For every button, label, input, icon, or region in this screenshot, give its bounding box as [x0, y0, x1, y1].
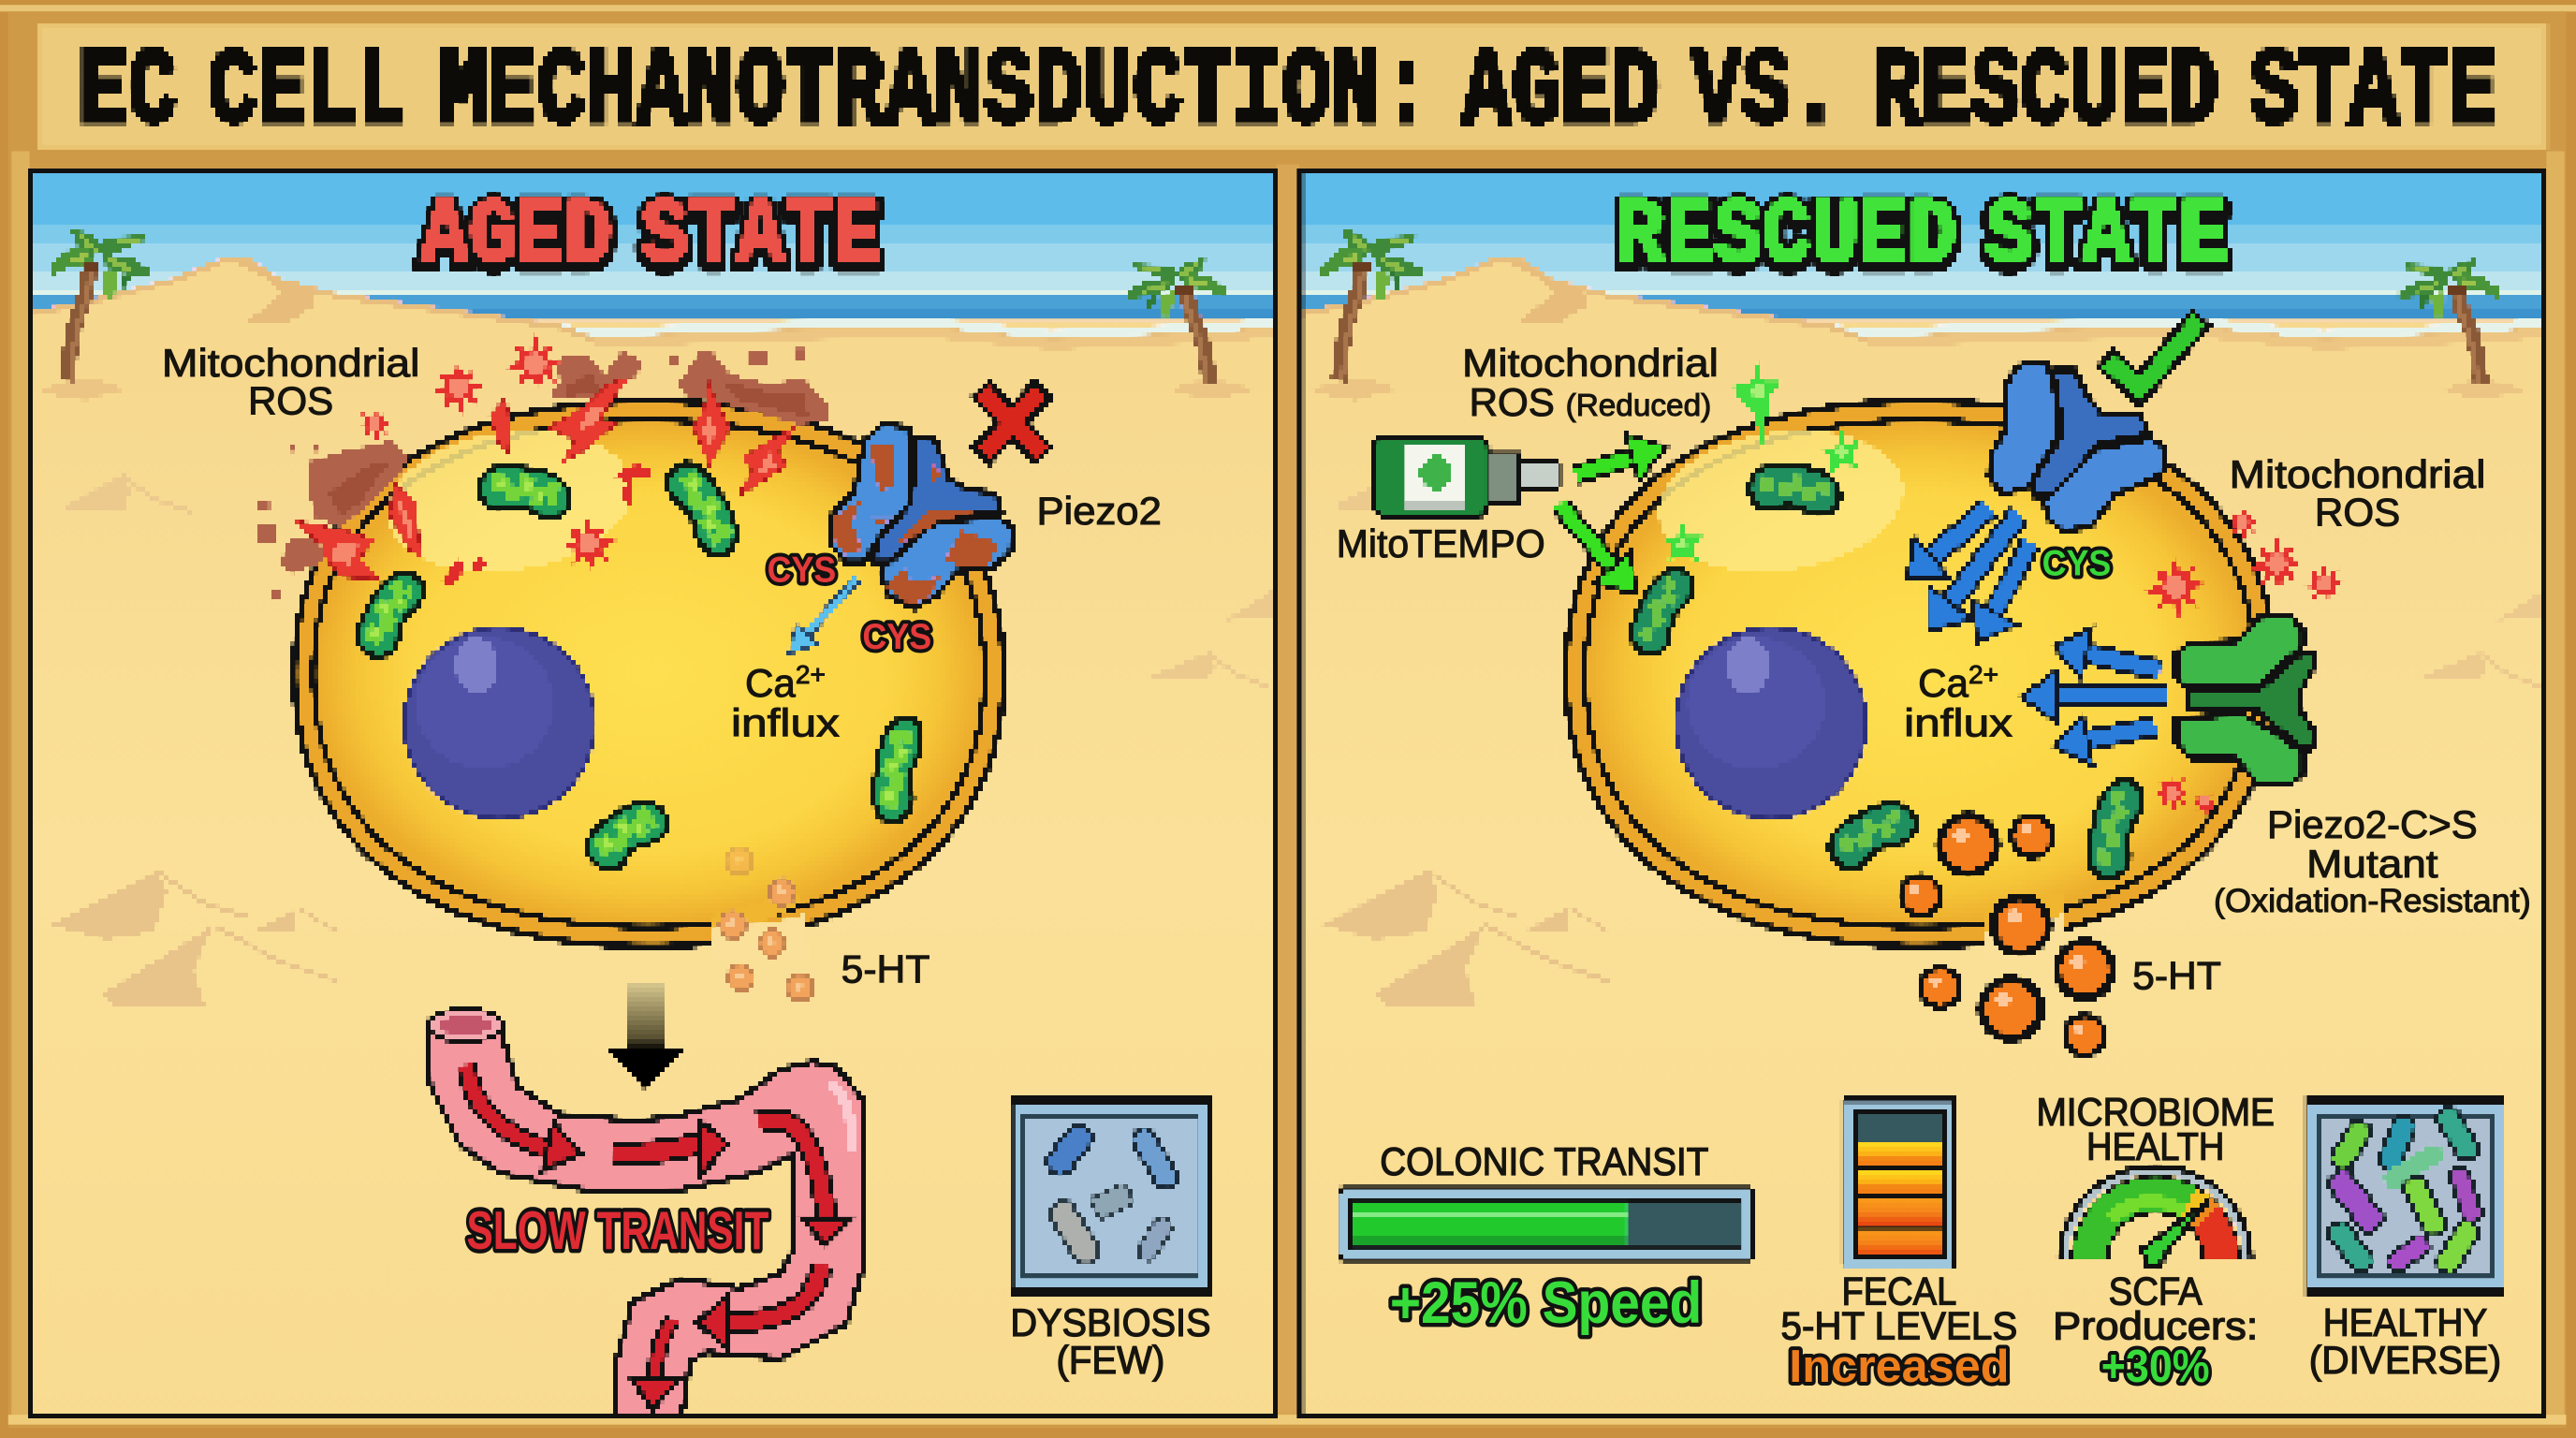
aged state heading: AGED STATE [420, 184, 881, 289]
panel: rescued state [1301, 171, 2545, 1415]
label: calcium influx: influx [731, 700, 840, 744]
label: healthy diverse: HEALTHY [2323, 1300, 2487, 1344]
label: CYS upper: CYS [768, 550, 836, 590]
label: SCFA producers: Producers: [2053, 1303, 2258, 1347]
check mark [2115, 327, 2193, 389]
label: +30%: +30% [2101, 1342, 2210, 1392]
label: MitoTEMPO: MitoTEMPO [1337, 521, 1545, 565]
MitoTEMPO bottle [1373, 437, 1559, 516]
panel border [31, 171, 1275, 1415]
mitochondria [1623, 462, 2145, 882]
label: fecal 5-HT levels: 5-HT LEVELS [1781, 1303, 2017, 1347]
dysbiosis panel icon [1010, 1096, 1211, 1295]
5-HT vesicles [1901, 815, 2113, 1055]
label: Piezo2-C>S mutant: (Oxidation-Resistant) [2214, 883, 2531, 919]
panel: aged state [31, 171, 1275, 1416]
label: SCFA producers: SCFA [2109, 1269, 2203, 1313]
beach background [1303, 174, 2545, 1415]
blue influx arrows from mutant [2021, 620, 2169, 773]
blue influx arrows from Piezo2 [1889, 487, 2054, 654]
beach background [31, 174, 1273, 1415]
fecal serotonin level meter [1841, 1096, 1956, 1270]
microbiome gauge [2062, 1168, 2249, 1269]
label: 5-HT: 5-HT [842, 947, 929, 991]
gap cytoplasm [1986, 894, 2063, 930]
label: CYS lower: CYS [862, 617, 931, 657]
label: calcium influx: Ca [1918, 660, 1998, 705]
gap cytoplasm [710, 892, 801, 930]
darker rust [329, 372, 809, 518]
mitochondria [349, 455, 924, 877]
rescued panel labels [1337, 341, 2531, 1392]
label: calcium influx: 2+ [796, 660, 826, 689]
5-HT vesicles [720, 848, 813, 1001]
aged panel artwork [31, 171, 1275, 1416]
rescued state heading: RESCUED STATE [1617, 188, 2228, 293]
label: Piezo2-C>S mutant: Piezo2-C>S [2267, 802, 2478, 846]
healthy diverse microbiome icon [2305, 1096, 2506, 1295]
label: mitochondrial ROS right: ROS [2315, 491, 2400, 535]
label: calcium influx: Ca [745, 660, 826, 705]
healthy Piezo2 channel [1989, 362, 2163, 531]
label: fecal 5-HT levels: FECAL [1841, 1269, 1956, 1313]
damaged Piezo2 channel [829, 424, 1013, 609]
bolt highlights [332, 404, 775, 565]
label: CYS: CYS [2042, 543, 2111, 583]
label: +25% speed: +25% Speed [1390, 1270, 1702, 1336]
reduced ROS green sparks [1664, 361, 1862, 562]
label: dysbiosis: (FEW) [1057, 1338, 1164, 1382]
label: mitochondrial ROS reduced: ROS (Reduced) [1470, 380, 1711, 424]
colon: slow transit [427, 1009, 862, 1416]
aged panel labels [162, 341, 1211, 1382]
panel border [1301, 171, 2545, 1415]
label: mitochondrial ROS: ROS [248, 378, 333, 422]
label: mitochondrial ROS right: Mitochondrial [2230, 452, 2485, 496]
label: 5-HT: 5-HT [2132, 954, 2221, 998]
ROS splats [357, 334, 616, 572]
label: dysbiosis: DYSBIOSIS [1010, 1300, 1211, 1344]
label: calcium influx: 2+ [1969, 660, 1998, 689]
label: microbiome health: HEALTH [2086, 1124, 2224, 1168]
black arrow down [605, 983, 687, 1091]
red X [989, 398, 1035, 447]
calcium arrow [778, 568, 869, 664]
label: microbiome health: MICROBIOME [2036, 1090, 2275, 1134]
cell: rescued [1562, 398, 2278, 949]
label: mitochondrial ROS reduced: Mitochondrial [1462, 341, 1719, 385]
lightning bolts [292, 377, 797, 579]
rust on channel [833, 447, 999, 606]
label: calcium influx: influx [1904, 700, 2012, 744]
label: healthy diverse: (DIVERSE) [2309, 1338, 2501, 1382]
cell: aged [291, 398, 1007, 949]
rust damage on membrane [256, 348, 829, 598]
5-HT membrane gap [710, 914, 809, 960]
Piezo2-C>S mutant channel [2176, 614, 2315, 785]
red ROS remaining [2144, 506, 2346, 815]
colonic transit progress bar [1338, 1186, 1754, 1262]
green delivery arrows [1541, 423, 1674, 610]
label: colonic transit: COLONIC TRANSIT [1380, 1139, 1708, 1183]
label: Piezo2-C>S mutant: Mutant [2306, 842, 2438, 886]
5-HT membrane gap [1986, 907, 2063, 960]
aged state heading: AGED STATE [420, 188, 881, 293]
label: increased: Increased [1789, 1342, 2009, 1392]
label: slow transit: SLOW TRANSIT [466, 1201, 768, 1261]
small ROS fragments [440, 463, 651, 585]
rescued panel artwork [1301, 171, 2545, 1415]
label: mitochondrial ROS: Mitochondrial [162, 341, 419, 385]
rescued state heading: RESCUED STATE [1617, 184, 2228, 289]
label: Piezo2: Piezo2 [1036, 489, 1162, 533]
